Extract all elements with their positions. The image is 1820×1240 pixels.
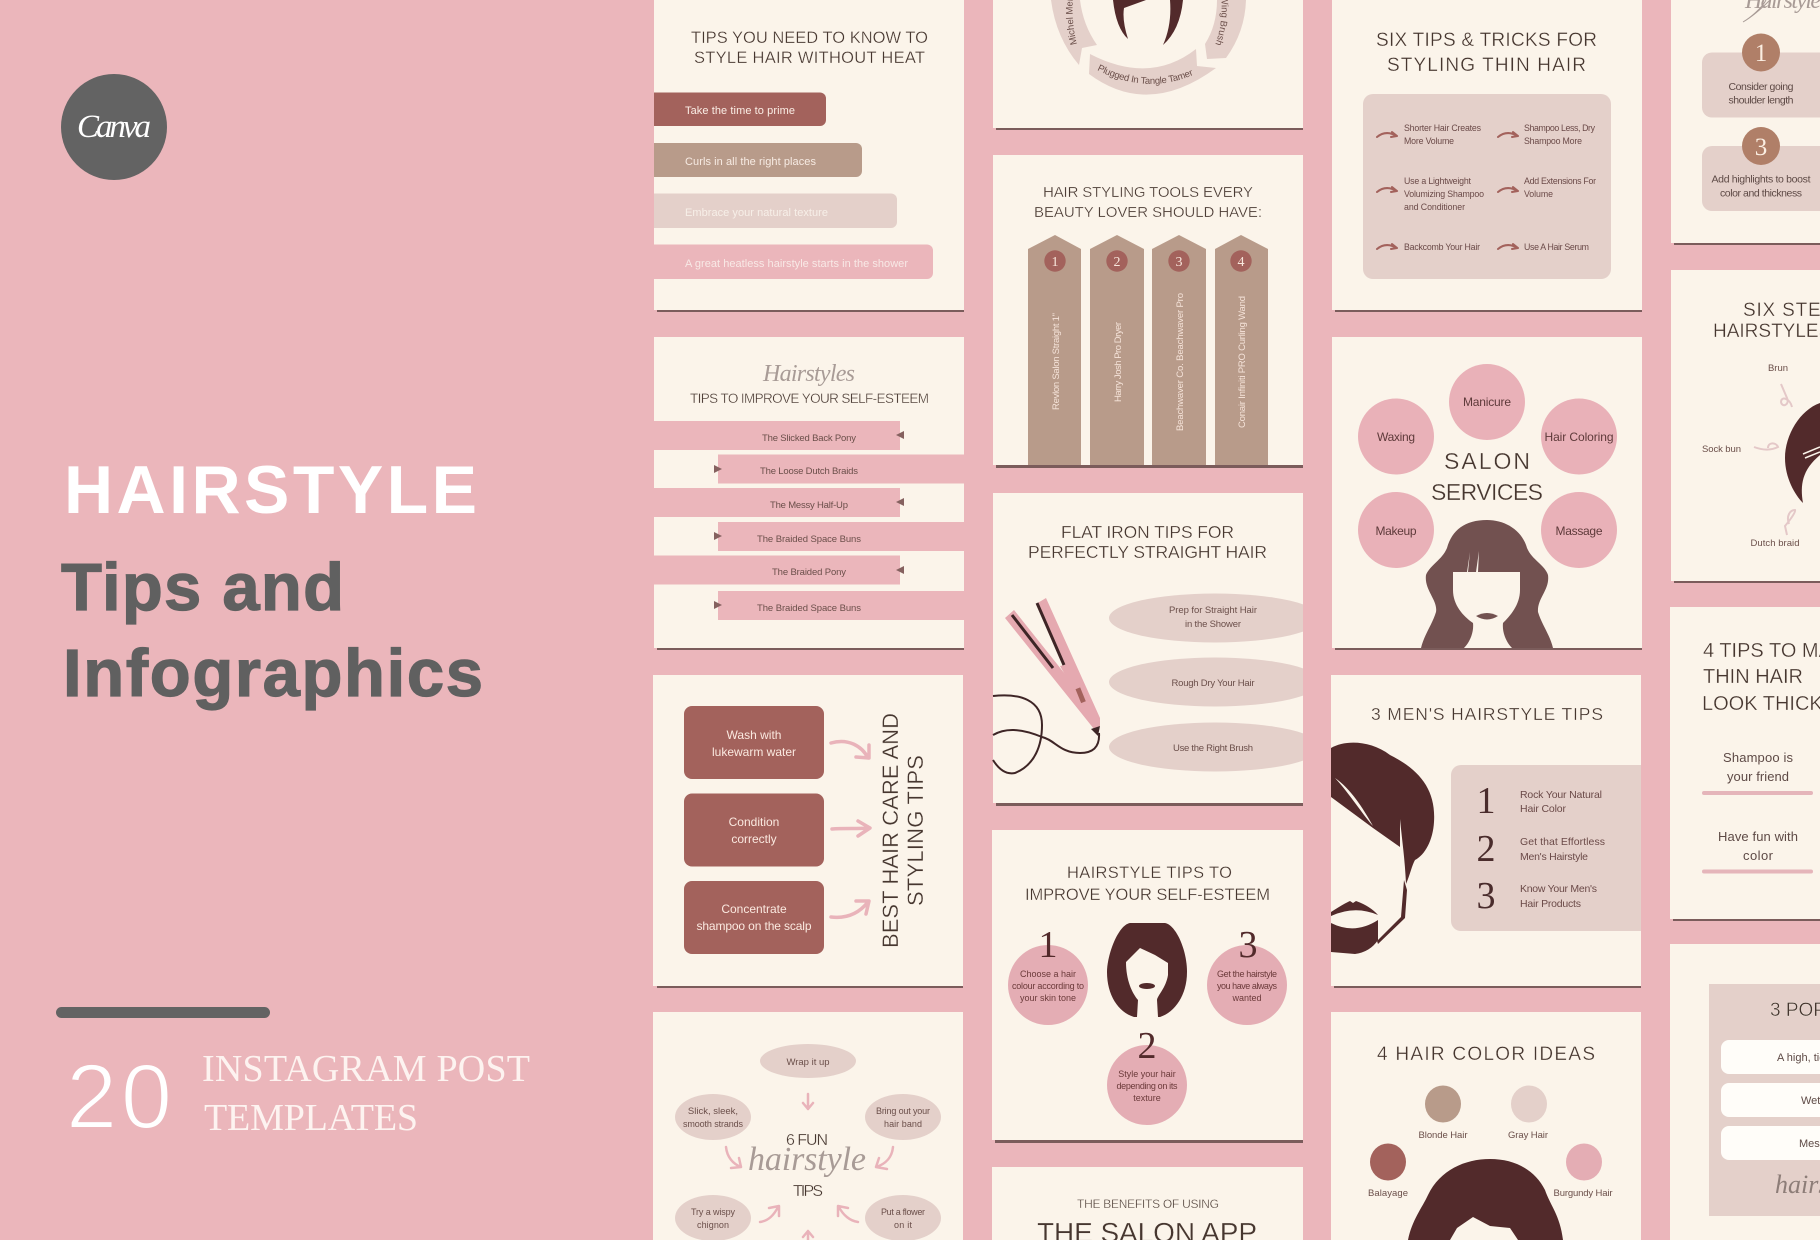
heading: SERVICES [1431, 479, 1543, 505]
circle 2: depending on its [1116, 1081, 1178, 1091]
arrow 2 [832, 821, 870, 836]
circle 2 [1107, 1025, 1187, 1125]
tip 2 [1109, 658, 1321, 706]
node: slick: smooth strands [683, 1119, 744, 1129]
script: hairstyle: hairstyle [748, 1141, 866, 1178]
icon: woman with bob [1107, 923, 1187, 1017]
node: chignon [675, 1195, 751, 1240]
pillar 3: 3 [1176, 255, 1182, 270]
bar: texture [654, 194, 897, 228]
numbers: 2 [1476, 828, 1496, 870]
pillar 1: 1 [1052, 255, 1058, 270]
tip text: Use a Lightweight [1404, 176, 1472, 186]
panel: thin hair tips (cropped right) [1671, 0, 1820, 245]
tip 3 [1109, 722, 1321, 772]
heading: SIX TIPS & TRICKS FOR [1376, 30, 1597, 51]
pillar 2: 2 [1114, 255, 1120, 270]
tip 1: your friend [1727, 769, 1789, 784]
circle 3: Get the hairstyle [1217, 969, 1277, 979]
panel: style hair without heat [654, 0, 964, 312]
labels [1702, 363, 1800, 549]
ribbon 6 [714, 591, 964, 620]
vertical heading: BEST HAIR CARE AND [878, 713, 903, 948]
ring segment: right [1205, 0, 1246, 59]
bubble: waxing [1358, 398, 1434, 474]
box: shampoo: shampoo on the scalp [696, 919, 812, 933]
heading: TIPS YOU NEED TO KNOW TO [691, 29, 928, 47]
tips box [1451, 765, 1641, 931]
ring segment: left [1051, 0, 1097, 65]
tip 1 [1109, 594, 1321, 642]
heading [1431, 448, 1543, 505]
ribbon 5: The Braided Pony [772, 567, 846, 578]
arrow 1 [831, 741, 869, 758]
icon: woman with wavy hair [1421, 520, 1553, 648]
heading: STYLING THIN HAIR [1387, 55, 1586, 76]
row 2 [1721, 1083, 1820, 1117]
centre heading [786, 1132, 828, 1200]
box: shampoo: Concentrate [721, 902, 787, 916]
tips box [1363, 94, 1611, 279]
box: lukewarm water [684, 706, 824, 779]
arrow 3 [831, 901, 869, 917]
centre heading: 6 FUN [786, 1132, 828, 1149]
heading [1028, 522, 1267, 562]
tip text [1404, 123, 1596, 252]
vertical heading [878, 713, 928, 948]
box: condition: correctly [731, 832, 777, 846]
box: lukewarm water: lukewarm water [712, 745, 796, 759]
tip text: Volumizing Shampoo [1404, 189, 1484, 199]
circle 2: texture [1133, 1093, 1161, 1103]
heading: Tips and Infographics: Tips and [61, 550, 344, 625]
bubble: hair coloring: Hair Coloring [1544, 430, 1614, 444]
panel: six tips thin hair [1332, 0, 1642, 312]
heading [1702, 640, 1820, 715]
heading: STYLE HAIR WITHOUT HEAT [694, 49, 925, 67]
tip 2 [1702, 829, 1813, 874]
heading: FLAT IRON TIPS FOR [1061, 522, 1234, 542]
bubble: manicure: Manicure [1463, 395, 1511, 409]
panel: salon app [992, 1167, 1303, 1240]
centre heading: TIPS [793, 1183, 823, 1200]
node: slick [675, 1094, 751, 1140]
node: hair band: Bring out your [876, 1106, 930, 1116]
step 1: 1 [1755, 40, 1767, 67]
node: flower: Put a flower [881, 1207, 925, 1217]
node: wrap it up [760, 1044, 856, 1078]
vertical heading: STYLING TIPS [903, 755, 928, 906]
swatch: gray: Gray Hair [1508, 1130, 1548, 1141]
tip text: Rock Your Natural [1520, 789, 1602, 801]
tip text: Shorter Hair Creates [1404, 123, 1482, 133]
ribbon 1 [654, 421, 904, 450]
panel: 3 popular (cropped right) [1670, 944, 1820, 1240]
tip text [1520, 789, 1605, 910]
swatch: gray [1508, 1086, 1548, 1141]
swatch: burgundy: Burgundy Hair [1554, 1188, 1612, 1199]
panel: thin hair look thicker (cropped right) [1670, 607, 1820, 921]
heading [1034, 184, 1262, 221]
bar: shower: A great heatless hairstyle starts in the shower [685, 258, 908, 270]
circle 3: 3 [1238, 924, 1258, 966]
text: Instagram post templates [202, 1048, 530, 1139]
heading: TIPS TO IMPROVE YOUR SELF-ESTEEM [690, 391, 929, 406]
heading [1376, 30, 1597, 76]
pillar 3 [1152, 235, 1206, 465]
ring segment: bottom: Plugged In Tangle Tamer [1098, 64, 1192, 86]
tip text: More Volume [1404, 136, 1454, 146]
swatch: blonde [1418, 1086, 1468, 1141]
panel: men's hairstyle tips [1331, 675, 1641, 988]
circle 1: Choose a hair [1020, 969, 1076, 979]
circle 1 [1008, 924, 1088, 1025]
circle 1: your skin tone [1020, 993, 1076, 1003]
circle 1: colour according to [1012, 981, 1084, 991]
text: Instagram post templates: INSTAGRAM POST [202, 1048, 530, 1090]
heading: HAIR STYLING TOOLS EVERY [1043, 184, 1253, 201]
step 3: Add highlights to boost [1712, 174, 1811, 186]
icon: hair [1113, 0, 1183, 45]
panel: hairstyle tips self-esteem numbered [992, 830, 1303, 1143]
bar: texture: Embrace your natural texture [685, 207, 828, 219]
bubble: massage: Massage [1556, 524, 1603, 538]
tip 1: in the Shower [1185, 619, 1241, 630]
pillar 2 [1090, 235, 1144, 465]
node: hair band: hair band [884, 1119, 922, 1129]
box: shampoo [684, 881, 824, 954]
numbers [1476, 780, 1496, 917]
tip text: Get that Effortless [1520, 836, 1605, 848]
step 1 [1702, 34, 1820, 118]
tip text: Backcomb Your Hair [1404, 242, 1480, 252]
tip 2: color [1743, 848, 1774, 863]
heading [1025, 864, 1270, 904]
tip text: Volume [1524, 189, 1553, 199]
ring segment: bottom [1089, 49, 1216, 95]
icon: hair [1785, 403, 1820, 503]
tip text: Men's Hairstyle [1520, 851, 1588, 863]
swatch: blonde: Blonde Hair [1418, 1130, 1468, 1141]
circle 1: 1 [1038, 924, 1058, 966]
numbers: 3 [1476, 875, 1496, 917]
step 3: 3 [1755, 134, 1767, 161]
pillar 2: Harry Josh Pro Dryer [1113, 322, 1124, 402]
panel: best hair care and styling tips [653, 675, 963, 988]
pillar 1: Revlon Salon Straight 1" [1051, 313, 1062, 410]
panel: flat iron tips [993, 493, 1321, 806]
bar: prime: Take the time to prime [685, 105, 795, 117]
heading: 4 HAIR COLOR IDEAS [1377, 1044, 1595, 1065]
ribbon 4 [714, 522, 964, 551]
circle 2: Style your hair [1118, 1069, 1176, 1079]
tip 1: Shampoo is [1723, 750, 1794, 765]
labels: Dutch braid [1750, 538, 1800, 549]
node: chignon: chignon [697, 1220, 729, 1230]
heading [691, 29, 928, 67]
icon: small hair curls [1754, 384, 1795, 535]
pillar 4: 4 [1238, 255, 1244, 270]
script flourish [1743, 0, 1820, 22]
node: chignon: Try a wispy [691, 1207, 736, 1217]
ribbon 1: The Slicked Back Pony [762, 433, 856, 444]
heading: HAIRSTYLE TIPS TO [1067, 864, 1232, 882]
bubble: hair coloring [1541, 398, 1617, 474]
step 1: Consider going [1728, 81, 1794, 93]
pillar 3: Beachwaver Co. Beachwaver Pro [1175, 293, 1186, 431]
circle 3: you have always [1217, 981, 1278, 991]
swatch: burgundy [1554, 1144, 1612, 1199]
bubble: waxing: Waxing [1377, 430, 1415, 444]
node: slick: Slick, sleek, [688, 1106, 738, 1117]
circle 3: wanted [1231, 993, 1262, 1003]
tip 3: Use the Right Brush [1173, 743, 1253, 754]
panel: hair color ideas [1331, 1012, 1641, 1240]
left cover panel [56, 74, 530, 1148]
circle 3 [1207, 924, 1287, 1025]
row 3 [1721, 1126, 1820, 1160]
bar: shower [654, 244, 933, 279]
tip text: Hair Products [1520, 898, 1581, 910]
ribbon 3: The Messy Half-Up [770, 500, 848, 511]
ribbon 2: The Loose Dutch Braids [760, 466, 858, 477]
ribbon 3 [654, 488, 904, 517]
divider bar [56, 1007, 270, 1018]
icon: Canva logo badge [61, 74, 167, 180]
heading: IMPROVE YOUR SELF-ESTEEM [1025, 886, 1270, 904]
inner box [1709, 984, 1820, 1216]
tip text: and Conditioner [1404, 202, 1465, 212]
tip text: Hair Color [1520, 803, 1566, 815]
heading [1713, 300, 1820, 342]
ribbon 6: The Braided Space Buns [757, 603, 861, 614]
node: flower: on it [894, 1220, 912, 1230]
heading: BEAUTY LOVER SHOULD HAVE: [1034, 204, 1262, 221]
numbers: 1 [1476, 780, 1496, 822]
ribbon 2 [714, 454, 964, 484]
box: condition [684, 794, 824, 866]
node: wrap it up: Wrap it up [786, 1057, 830, 1068]
ribbon 5 [654, 556, 904, 584]
bubble: massage [1541, 492, 1617, 568]
swatch: balayage [1368, 1144, 1408, 1199]
step 1: shoulder length [1728, 94, 1794, 106]
tip text: Shampoo More [1524, 136, 1582, 146]
icon: man with beard [1331, 743, 1434, 954]
tip 1: Prep for Straight Hair [1169, 605, 1257, 616]
tip 2: Rough Dry Your Hair [1172, 678, 1254, 689]
node: flower [865, 1195, 941, 1240]
arrows [1377, 132, 1518, 249]
panel: salon services [1332, 337, 1642, 650]
bubble: manicure [1449, 364, 1525, 440]
pillar 1 [1028, 235, 1081, 465]
box: condition: Condition [729, 815, 779, 829]
tip 1 [1702, 750, 1813, 795]
panel: tools ring (top, cropped) [993, 0, 1303, 130]
heading [1037, 1197, 1257, 1240]
bar: curls: Curls in all the right places [685, 156, 816, 168]
heading: THIN HAIR [1703, 666, 1803, 688]
bar: prime [654, 92, 826, 126]
heading: 3 MEN'S HAIRSTYLE TIPS [1371, 704, 1603, 724]
tip text: Shampoo Less, Dry [1524, 123, 1596, 133]
pillar 4: Conair Infiniti PRO Curling Wand [1237, 296, 1248, 428]
heading: SALON [1444, 448, 1530, 474]
tip text: Know Your Men's [1520, 883, 1597, 895]
bubble: makeup [1358, 492, 1434, 568]
circle 2: 2 [1138, 1025, 1156, 1067]
panel: hair styling tools [993, 155, 1303, 468]
icon: hair [1408, 1159, 1563, 1240]
step 3: color and thickness [1720, 188, 1802, 200]
heading: THE BENEFITS OF USING [1077, 1197, 1219, 1211]
text: Instagram post templates: TEMPLATES [204, 1097, 418, 1139]
panel: 6 fun hairstyle tips [653, 1012, 963, 1240]
node: hair band [865, 1094, 941, 1140]
swatch: balayage: Balayage [1368, 1188, 1408, 1199]
script: Hairstyles: Hairstyles [762, 361, 855, 387]
box: lukewarm water: Wash with [727, 728, 781, 742]
tip 2: Have fun with [1718, 829, 1798, 844]
heading: Tips and Infographics: Infographics [63, 636, 483, 711]
heading: Tips and Infographics [61, 550, 483, 711]
panel: six step hairstyles (cropped right) [1671, 270, 1820, 583]
bubble: makeup: Makeup [1376, 524, 1417, 538]
step 3 [1702, 127, 1820, 211]
labels: Sock bun [1702, 444, 1741, 455]
row 1 [1721, 1040, 1820, 1074]
heading: HAIRSTYLE: HAIRSTYLE [64, 452, 477, 528]
labels: Brun [1768, 363, 1788, 374]
icon: flat iron [993, 598, 1100, 773]
number: 20: 20 [66, 1046, 172, 1148]
pillar 4 [1215, 235, 1268, 465]
tip text: Add Extensions For [1524, 176, 1596, 186]
panel: tips to improve self-esteem list [654, 337, 964, 650]
tip text: Use A Hair Serum [1524, 242, 1589, 252]
bar: curls [654, 143, 862, 177]
ribbon 4: The Braided Space Buns [757, 534, 861, 545]
icon: Canva logo badge: Canva [77, 109, 151, 145]
heading: PERFECTLY STRAIGHT HAIR [1028, 542, 1267, 562]
arrows [726, 1094, 893, 1240]
